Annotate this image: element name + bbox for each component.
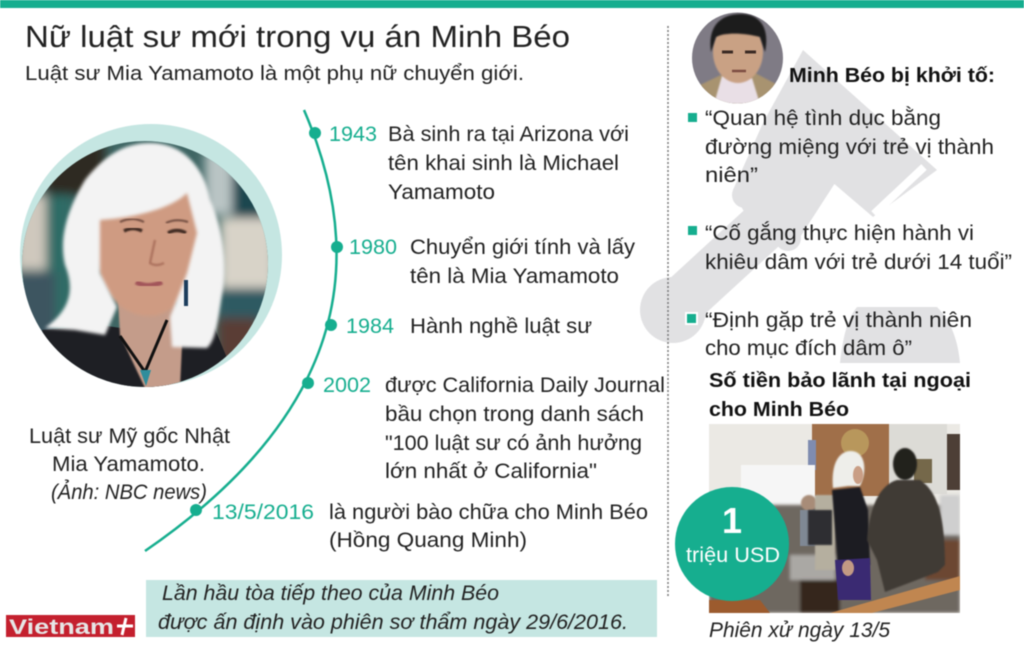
title: Nữ luật sư mới trong vụ án Minh Béo <box>25 19 570 54</box>
jacket <box>42 326 226 388</box>
neck and chest <box>118 300 182 388</box>
photo caption: Phiên xử ngày 13/5 <box>709 619 890 642</box>
charge 3: “Định gặp trẻ vị thành niên <box>705 309 972 332</box>
heading: bail: cho Minh Béo <box>709 399 849 421</box>
subtitle: Luật sư Mia Yamamoto là một phụ nữ chuyển giới. <box>25 63 524 85</box>
top bar <box>0 0 1024 8</box>
timeline entry 13/5/2016: (Hồng Quang Minh) <box>329 529 527 552</box>
timeline entry 2002: "100 luật sư có ảnh hưởng <box>385 432 642 455</box>
icon: gavel watermark <box>640 50 960 363</box>
necklace <box>120 320 167 372</box>
timeline entry 1984 <box>325 315 592 338</box>
callout: next hearing: Lần hầu tòa tiếp theo của Minh Béo <box>162 582 499 605</box>
charge 1: “Quan hệ tình dục bằng <box>705 107 941 130</box>
eyes and brows <box>124 228 186 233</box>
hair <box>45 143 224 348</box>
timeline entry 2002: 2002 <box>323 374 371 397</box>
charge 1 <box>688 107 994 187</box>
portrait: Minh Béo <box>690 10 786 106</box>
charge 2: khiêu dâm với trẻ dưới 14 tuổi” <box>705 251 1012 274</box>
charge 2 <box>688 222 1012 274</box>
charge 1: niên” <box>705 164 758 187</box>
badge: bail amount <box>675 487 789 601</box>
timeline entry 1943: Bà sinh ra tại Arizona với <box>388 123 629 146</box>
timeline entry 2002: được California Daily Journal <box>385 374 665 397</box>
logo: Vietnam+: Vietnam <box>9 616 114 639</box>
timeline entry 1984: 1984 <box>346 315 394 338</box>
badge: bail amount: triệu USD <box>686 544 780 567</box>
timeline entry 2002: lớn nhất ở California" <box>385 460 597 483</box>
railing <box>709 600 770 613</box>
timeline entry 13/5/2016: 13/5/2016 <box>212 501 314 524</box>
portrait caption: Mia Yamamoto. <box>52 453 205 476</box>
logo: Vietnam+ <box>6 615 135 639</box>
portrait caption: Luật sư Mỹ gốc Nhật <box>29 425 230 448</box>
timeline entry 13/5/2016 <box>190 501 648 552</box>
badge: bail amount: 1 <box>722 500 742 541</box>
face <box>98 192 200 314</box>
charge 1: đường miệng với trẻ vị thành <box>705 136 994 159</box>
timeline entry 1980: Chuyển giới tính và lấy <box>410 236 636 259</box>
timeline entry 1984: Hành nghề luật sư <box>410 315 592 338</box>
timeline entry 1980: tên là Mia Yamamoto <box>410 265 619 288</box>
heading: charges: Minh Béo bị khởi tố: <box>789 65 995 87</box>
photo: courtroom <box>709 424 960 613</box>
timeline entry 1980: 1980 <box>349 236 397 259</box>
timeline entry 13/5/2016: là người bào chữa cho Minh Béo <box>329 501 648 524</box>
timeline entry 1943: 1943 <box>329 123 377 146</box>
timeline entry 1943: Yamamoto <box>388 181 495 204</box>
woman in black <box>832 487 870 566</box>
charge 3: cho mục đích dâm ô” <box>705 337 912 360</box>
timeline entry 2002: bầu chọn trong danh sách <box>385 403 644 426</box>
man in suit <box>867 480 945 592</box>
heading: bail <box>709 370 971 421</box>
charge 3 <box>685 309 972 360</box>
charge 2: “Cố gắng thực hiện hành vi <box>705 222 974 245</box>
callout: next hearing: được ấn định vào phiên sơ thẩm ngày 29/6/2016. <box>158 611 628 634</box>
timeline entry 1943: tên khai sinh là Michael <box>388 152 619 175</box>
callout: next hearing <box>146 580 657 637</box>
timeline entry 1980 <box>331 236 636 288</box>
portrait caption: (Ảnh: NBC news) <box>51 480 207 504</box>
timeline entry 1943 <box>309 123 629 204</box>
portrait caption <box>29 425 230 504</box>
dotted divider <box>667 26 669 596</box>
timeline entry 2002 <box>302 374 665 483</box>
portrait: Mia Yamamoto <box>15 124 282 400</box>
timeline arc <box>145 110 337 551</box>
heading: bail: Số tiền bảo lãnh tại ngoại <box>709 370 971 392</box>
